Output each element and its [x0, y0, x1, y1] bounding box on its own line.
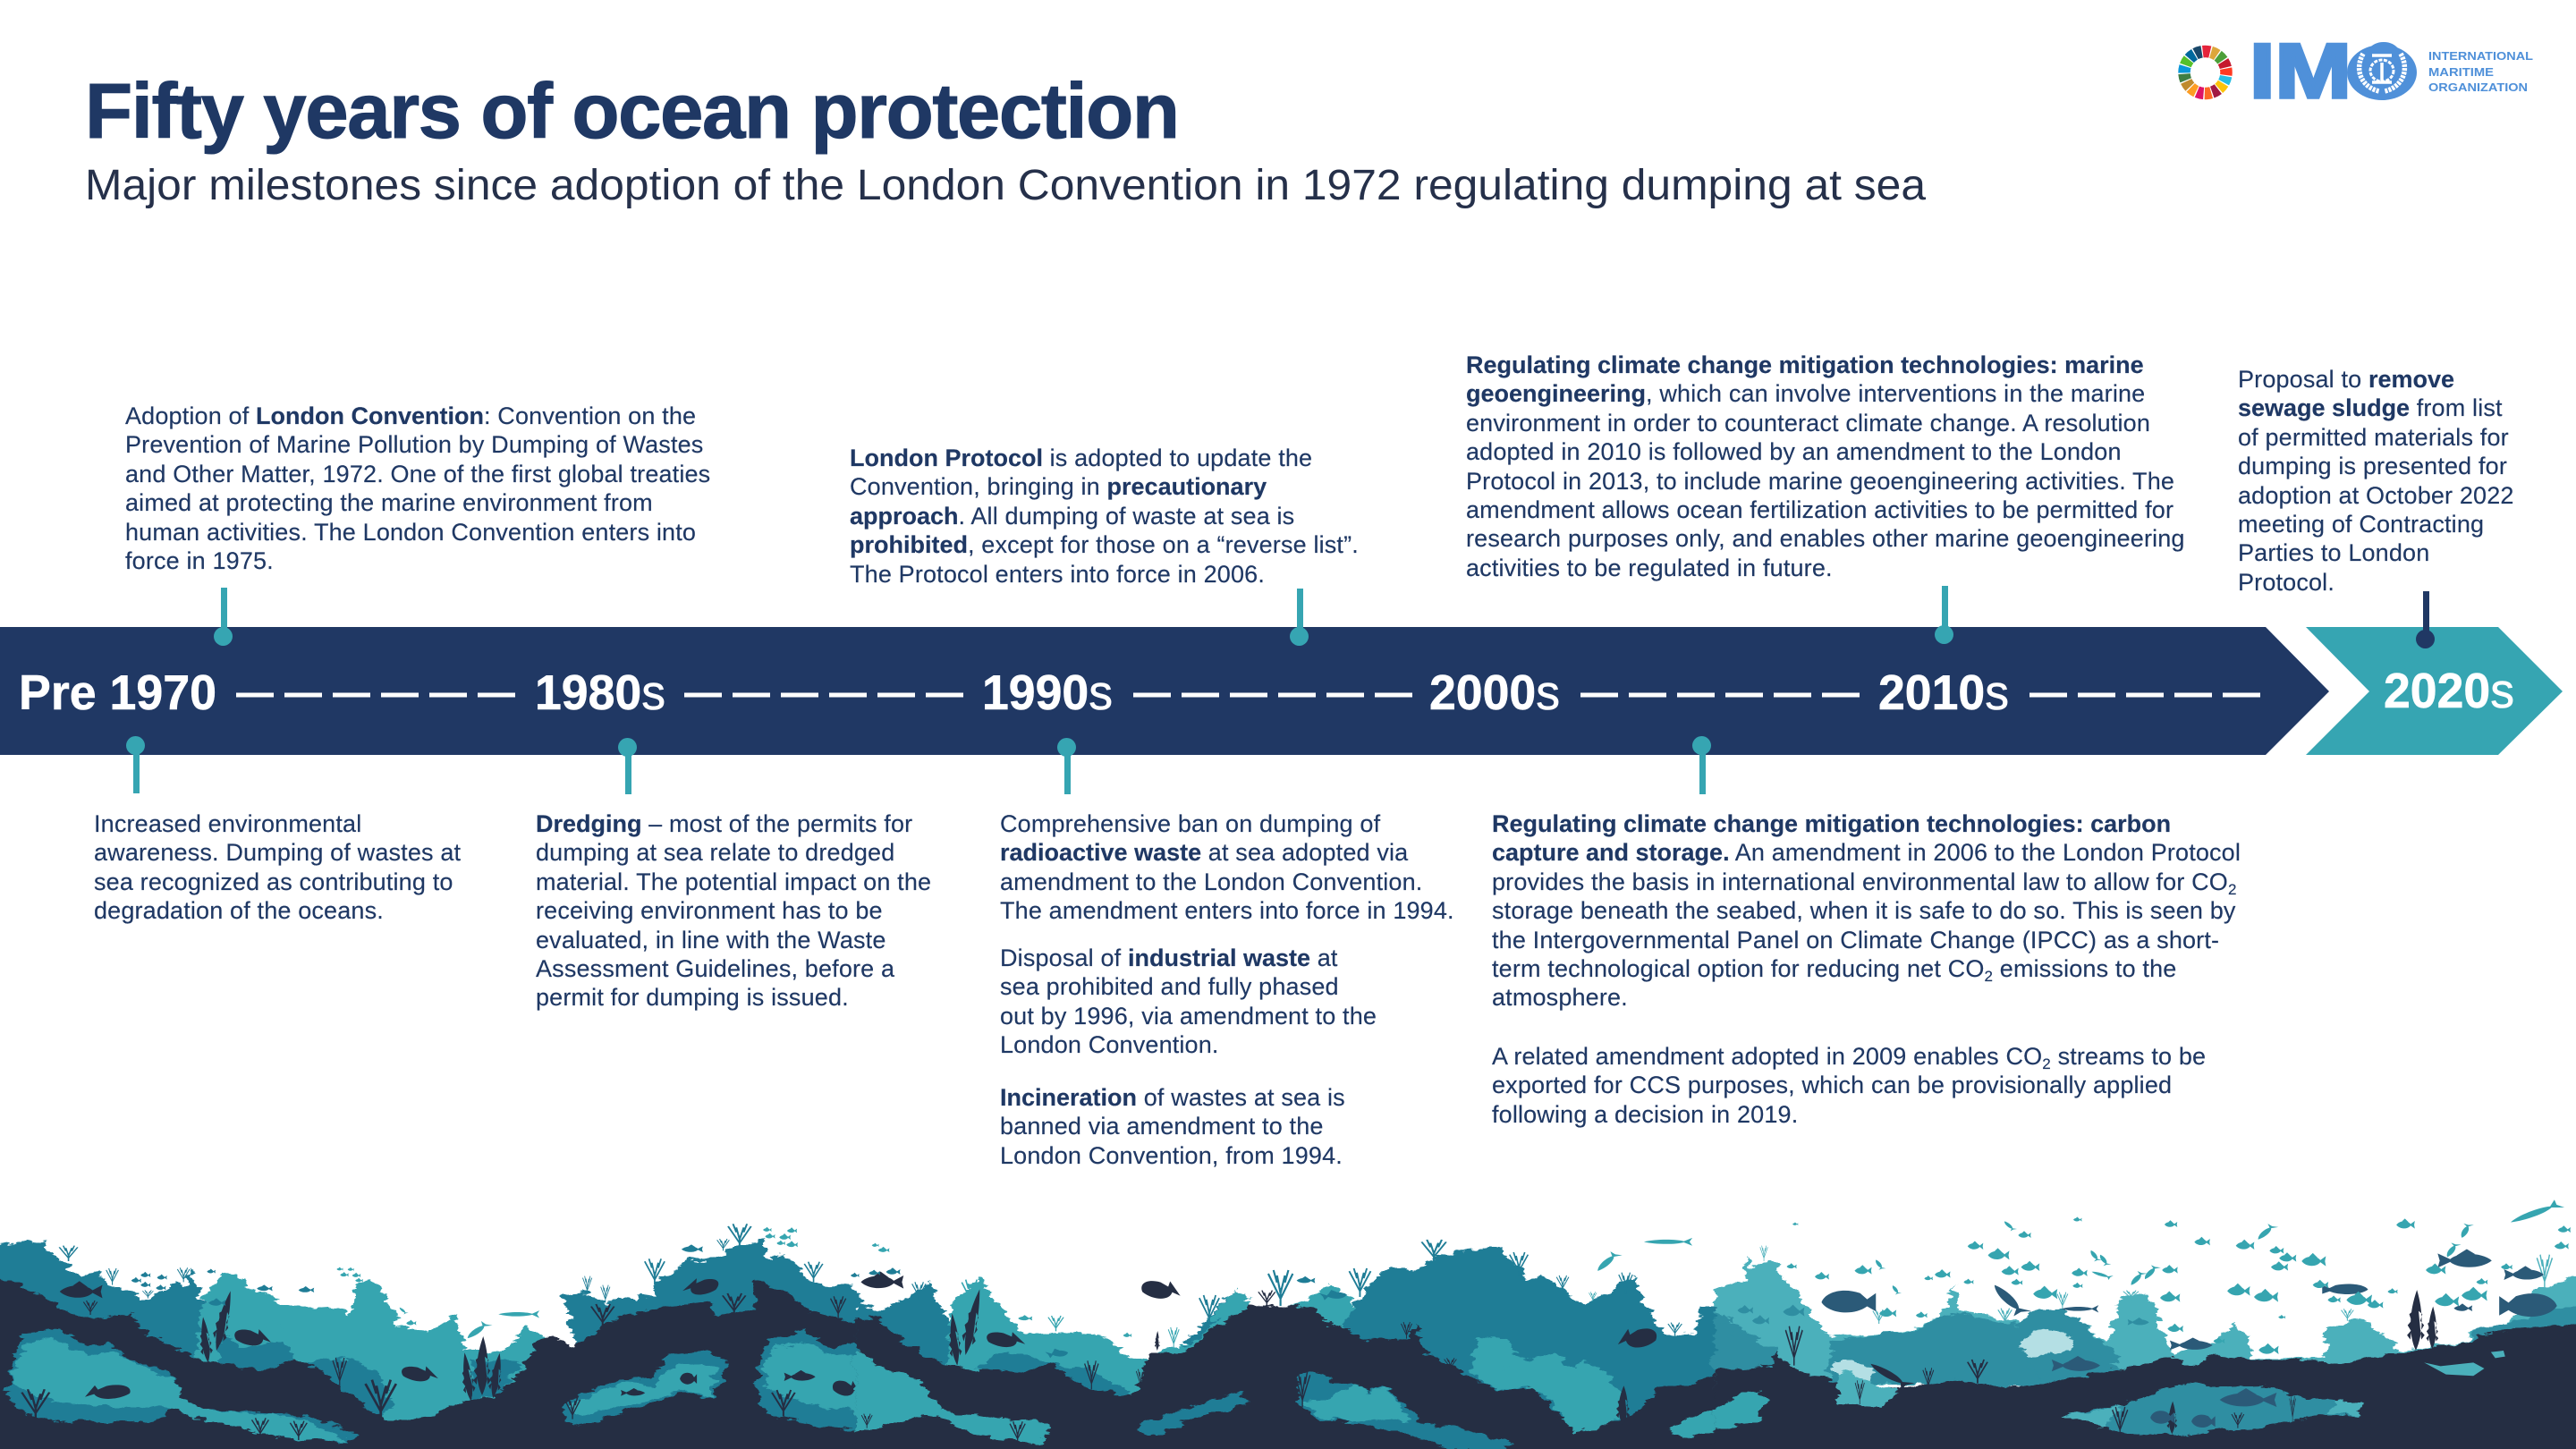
text: 1980s dredging — [536, 810, 931, 1011]
reef panel: centre — [856, 1238, 1722, 1449]
text: pre 1970 awareness — [94, 810, 461, 924]
text: 1990s industrial waste: London Convention. — [1000, 1031, 1219, 1058]
text: 1990s industrial waste: out by 1996, via amendment to the — [1000, 1003, 1377, 1030]
text: London Protocol: The Protocol enters into force in 2006. — [850, 561, 1265, 588]
organisation name — [2428, 49, 2533, 94]
logo: IMO and SDG wheel — [2178, 29, 2533, 114]
text: 1990s radioactive waste — [1000, 810, 1454, 924]
text: London Protocol: approach. All dumping of waste at sea is — [850, 503, 1294, 530]
teal fish — [131, 1244, 860, 1306]
marker: 1980s — [618, 738, 637, 794]
text: sewage sludge proposal: Protocol. — [2238, 569, 2334, 596]
text: 1990s radioactive waste: radioactive waste at sea adopted via — [1000, 839, 1408, 866]
text: 1990s radioactive waste: The amendment enters into force in 1994. — [1000, 897, 1454, 924]
dark foreground rock — [0, 1276, 863, 1449]
organisation name: ORGANIZATION — [2428, 80, 2528, 94]
dark kelp — [196, 1288, 505, 1402]
cave: right — [1669, 1407, 1722, 1437]
corals on crest — [59, 1224, 823, 1303]
reef body fish — [1716, 1305, 2149, 1337]
decade labels: Pre 1970 — [19, 665, 216, 720]
marker: London Protocol — [1290, 589, 1309, 646]
icon: SDG colour wheel — [2182, 50, 2228, 95]
text: CO2 streams export: following a decision in 2019. — [1492, 1101, 1798, 1128]
title: Fifty years of ocean protection — [85, 68, 1179, 155]
IMO wordmark: IM — [2250, 29, 2351, 114]
cave: small right — [2424, 1351, 2505, 1376]
text: pre 1970 awareness: Increased environmental — [94, 810, 361, 837]
organisation name: MARITIME — [2428, 65, 2494, 79]
text: London Convention — [125, 402, 710, 574]
decade labels — [19, 663, 2514, 720]
pale light window — [1835, 1329, 2073, 1402]
text: carbon capture and storage: term technological option for reducing net CO2 emissions to the — [1492, 955, 2176, 985]
back reef: light teal — [186, 1273, 554, 1449]
text: 1990s incineration — [1000, 1084, 1345, 1169]
text: pre 1970 awareness: degradation of the oceans. — [94, 897, 384, 924]
decade labels: 2000s — [1429, 665, 1560, 720]
reef panel: left — [0, 1224, 863, 1449]
marker: sewage sludge 2020s — [2416, 591, 2435, 648]
small teal fish school — [1787, 1199, 2571, 1354]
text: marine geoengineering: Protocol in 2013, to include marine geoengineering activities. The — [1466, 468, 2174, 495]
subtitle: Major milestones since adoption of the London Convention in 1972 regulating dumping at sea — [85, 162, 1926, 209]
text: marine geoengineering — [1466, 352, 2185, 581]
corals and kelp — [1760, 1246, 2552, 1324]
text: pre 1970 awareness: sea recognized as contributing to — [94, 869, 453, 895]
text: 1990s industrial waste — [1000, 945, 1377, 1058]
text: sewage sludge proposal: sewage sludge from list — [2238, 394, 2503, 421]
kelp and corals — [945, 1286, 1630, 1425]
text: 1990s radioactive waste: Comprehensive ban on dumping of — [1000, 810, 1380, 837]
decade labels: 1990s — [982, 665, 1113, 720]
marker: carbon capture — [1692, 736, 1711, 794]
text: London Protocol: London Protocol is adopted to update the — [850, 445, 1312, 471]
text: 1980s dredging: material. The potential impact on the — [536, 869, 931, 895]
text: London Convention: Adoption of London Convention: Convention on the — [125, 402, 696, 429]
text: marine geoengineering: Regulating climate change mitigation technologies: marine — [1466, 352, 2144, 378]
decade labels: 2020s — [2384, 663, 2514, 718]
text: carbon capture and storage: capture and storage. An amendment in 2006 to the London Protocol — [1492, 839, 2241, 866]
text: London Protocol: Convention, bringing in precautionary — [850, 473, 1267, 500]
decade labels: 2010s — [1878, 665, 2009, 720]
marker: 1990s — [1057, 738, 1076, 794]
text: London Protocol — [850, 445, 1359, 588]
cave: centre right — [559, 1351, 729, 1425]
text: London Protocol: prohibited, except for those on a “reverse list”. — [850, 531, 1359, 558]
text: 1990s industrial waste: Disposal of industrial waste at — [1000, 945, 1338, 971]
text: carbon capture and storage: storage beneath the seabed, when it is safe to do so. This is seen by — [1492, 897, 2236, 924]
dark foreground rock — [1715, 1321, 2576, 1449]
light patch on hill — [1472, 1335, 1626, 1440]
text: 1990s incineration: London Convention, from 1994. — [1000, 1142, 1343, 1169]
cave: centre — [1297, 1370, 1512, 1449]
text: 1980s dredging: receiving environment has to be — [536, 897, 883, 924]
text: CO2 streams export: exported for CCS purposes, which can be provisionally applied — [1492, 1072, 2172, 1098]
text: CO2 streams export — [1492, 1043, 2206, 1128]
dashed connectors — [236, 692, 2260, 698]
back reef: light teal — [1715, 1255, 2576, 1389]
text: London Convention: aimed at protecting the marine environment from — [125, 489, 653, 516]
text: London Convention: Prevention of Marine Pollution by Dumping of Wastes — [125, 431, 703, 458]
text: carbon capture and storage: provides the basis in international environmental law to allow for CO2 — [1492, 869, 2237, 898]
arrow: 2020s teal chevron — [2306, 627, 2563, 755]
cave: elongated — [1135, 1392, 1249, 1436]
text: marine geoengineering: environment in order to counteract climate change. A resolution — [1466, 410, 2150, 436]
dark foreground rock — [856, 1304, 1722, 1449]
text: sewage sludge proposal: adoption at October 2022 — [2238, 482, 2514, 509]
timeline banner — [0, 627, 2563, 755]
lower reef band — [1715, 1348, 2123, 1386]
icon: UN style emblem with wreath — [2360, 54, 2404, 91]
cave: large lower — [2063, 1382, 2365, 1436]
teal fish — [869, 1267, 1350, 1358]
text: London Convention: human activities. The London Convention enters into — [125, 519, 696, 546]
text: pre 1970 awareness: awareness. Dumping of wastes at — [94, 839, 461, 866]
text: marine geoengineering: research purposes only, and enables other marine geoengineering — [1466, 525, 2185, 552]
marker: marine geoengineering — [1935, 586, 1953, 644]
back reef: mid teal — [0, 1239, 384, 1449]
decade labels: 1980s — [535, 665, 665, 720]
back reef: light teal — [946, 1275, 1368, 1419]
text: marine geoengineering: geoengineering, which can involve interventions in the marine — [1466, 380, 2145, 407]
cave: left — [1715, 1391, 1767, 1428]
reef panel: right — [1715, 1199, 2576, 1449]
dark fish — [60, 1276, 860, 1400]
text: carbon capture and storage: the Intergovernmental Panel on Climate Change (IPCC) as a short- — [1492, 927, 2219, 953]
text: 1990s incineration: banned via amendment to the — [1000, 1113, 1324, 1140]
text: 1980s dredging: dumping at sea relate to dredged — [536, 839, 894, 866]
text: sewage sludge proposal: Parties to London — [2238, 539, 2429, 566]
dark corals — [21, 1293, 846, 1440]
text: 1990s radioactive waste: amendment to the London Convention. — [1000, 869, 1422, 895]
text: marine geoengineering: amendment allows ocean fertilization activities to be permitted for — [1466, 496, 2174, 523]
text: carbon capture and storage — [1492, 810, 2241, 1011]
text: marine geoengineering: adopted in 2010 is followed by an amendment to the London — [1466, 438, 2122, 465]
text: London Convention: and Other Matter, 1972. One of the first global treaties — [125, 461, 710, 487]
text: 1990s industrial waste: sea prohibited and fully phased — [1000, 973, 1339, 1000]
cave: pale vertical — [1835, 1371, 1898, 1409]
text: marine geoengineering: activities to be regulated in future. — [1466, 555, 1833, 581]
text: 1980s dredging: Assessment Guidelines, before a — [536, 955, 894, 982]
text: carbon capture and storage: atmosphere. — [1492, 984, 1628, 1011]
marker: London Convention — [214, 588, 233, 646]
back reef: mid teal — [856, 1281, 1258, 1389]
text: 1990s incineration: Incineration of wastes at sea is — [1000, 1084, 1345, 1111]
text: sewage sludge proposal: of permitted materials for — [2238, 424, 2509, 451]
text: London Convention: force in 1975. — [125, 547, 274, 574]
corals on crest — [912, 1240, 1682, 1335]
marker: pre 1970 — [126, 736, 145, 793]
cave: left — [856, 1348, 1050, 1445]
reef shading patches — [219, 1239, 863, 1449]
dark kelp and corals — [2166, 1290, 2438, 1434]
large blue fish — [1821, 1250, 2557, 1428]
cave: left — [8, 1328, 356, 1443]
text: CO2 streams export: A related amendment adopted in 2009 enables CO2 streams to be — [1492, 1043, 2206, 1072]
text: 1980s dredging: evaluated, in line with the Waste — [536, 927, 886, 953]
text: carbon capture and storage: Regulating climate change mitigation technologies: carbon — [1492, 810, 2171, 837]
text: 1980s dredging: permit for dumping is issued. — [536, 984, 849, 1011]
organisation name: INTERNATIONAL — [2428, 49, 2533, 63]
IMO wordmark: O — [2361, 29, 2406, 114]
text: sewage sludge proposal: Proposal to remove — [2238, 366, 2454, 393]
cave: right edge — [756, 1331, 863, 1428]
dark fish — [860, 1272, 1663, 1349]
text: sewage sludge proposal — [2238, 366, 2514, 596]
big mid teal hill — [1330, 1245, 1722, 1449]
reef shading — [1715, 1303, 2576, 1386]
text: 1980s dredging: Dredging – most of the permits for — [536, 810, 912, 837]
arrow: 1970s to 2010s navy band — [0, 627, 2329, 755]
IMO wordmark — [2250, 29, 2417, 114]
text: sewage sludge proposal: dumping is presented for — [2238, 453, 2507, 479]
text: sewage sludge proposal: meeting of Contracting — [2238, 511, 2484, 538]
